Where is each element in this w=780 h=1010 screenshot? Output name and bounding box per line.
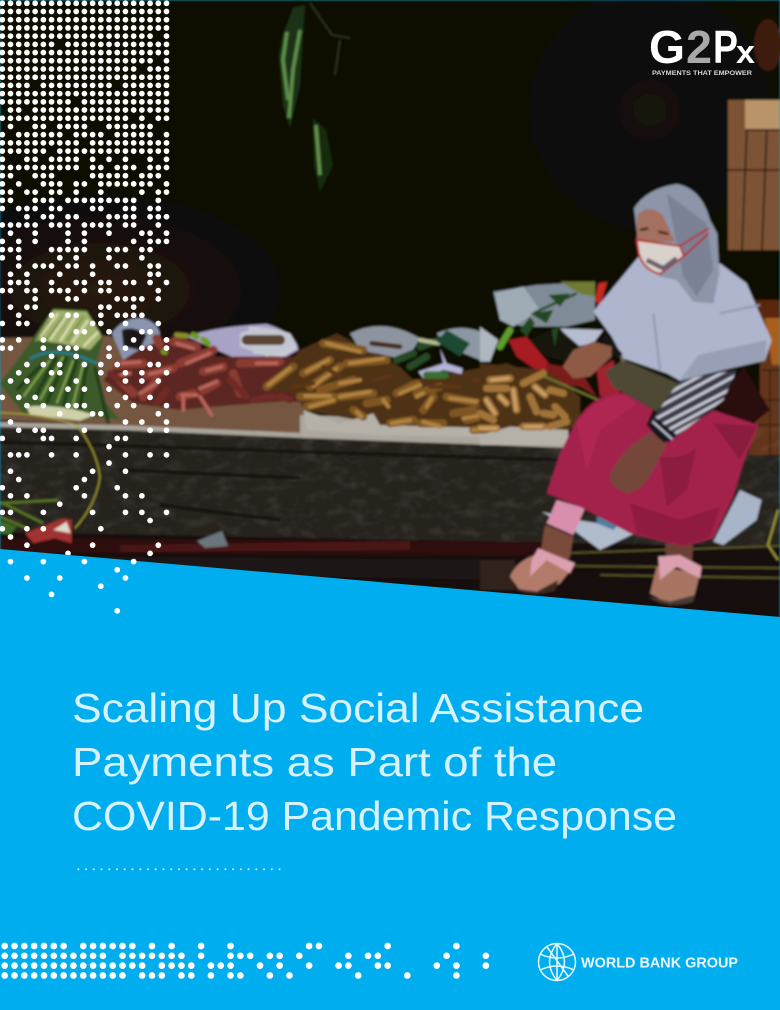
- hand on knee: [609, 432, 667, 493]
- bottom dot strip: [5, 946, 486, 975]
- G2Px logo: G: [649, 21, 685, 73]
- plastic bags behind produce: [112, 318, 298, 363]
- mask: [637, 240, 684, 274]
- G2Px logo: [649, 21, 755, 77]
- tiled wall, right: [728, 19, 780, 455]
- title: Scaling Up Social Assistance: [72, 685, 644, 731]
- icon: globe: [538, 944, 576, 980]
- G2Px logo: x: [736, 34, 755, 70]
- hijab: [634, 184, 719, 303]
- G2Px logo: PAYMENTS THAT EMPOWER: [652, 70, 752, 77]
- dot pattern overlay, left: [2, 3, 167, 553]
- cardboard counter and ledge: [0, 336, 570, 448]
- green onion bundle: [0, 308, 120, 543]
- G2Px logo: 2: [686, 21, 712, 73]
- pile of turmeric and ginger roots: [240, 326, 573, 438]
- World Bank Group logo: WORLD BANK GROUP: [581, 956, 738, 972]
- cape: [593, 255, 772, 381]
- bag: [605, 360, 678, 412]
- title: Payments as Part of the: [72, 739, 557, 785]
- title: [72, 685, 677, 839]
- arm and hand: [563, 342, 612, 378]
- hanging plant: [279, 3, 350, 192]
- red ginger roots: [103, 335, 300, 415]
- right-hand bags and vegetables: [480, 282, 620, 445]
- G2Px logo: P: [713, 21, 738, 73]
- skirt: [547, 393, 758, 547]
- background: market photograph: [0, 0, 780, 620]
- blue lower panel: [0, 549, 780, 1010]
- dotted rule: [78, 868, 280, 870]
- striped sleeve: [648, 369, 738, 440]
- feet and sandals: [510, 553, 573, 593]
- title: COVID-19 Pandemic Response: [72, 793, 677, 839]
- dots on blue panel: [11, 562, 134, 611]
- face: [637, 209, 675, 242]
- seller woman: [510, 184, 772, 605]
- World Bank Group logo: [538, 944, 738, 980]
- stone wall and floor: [0, 425, 780, 620]
